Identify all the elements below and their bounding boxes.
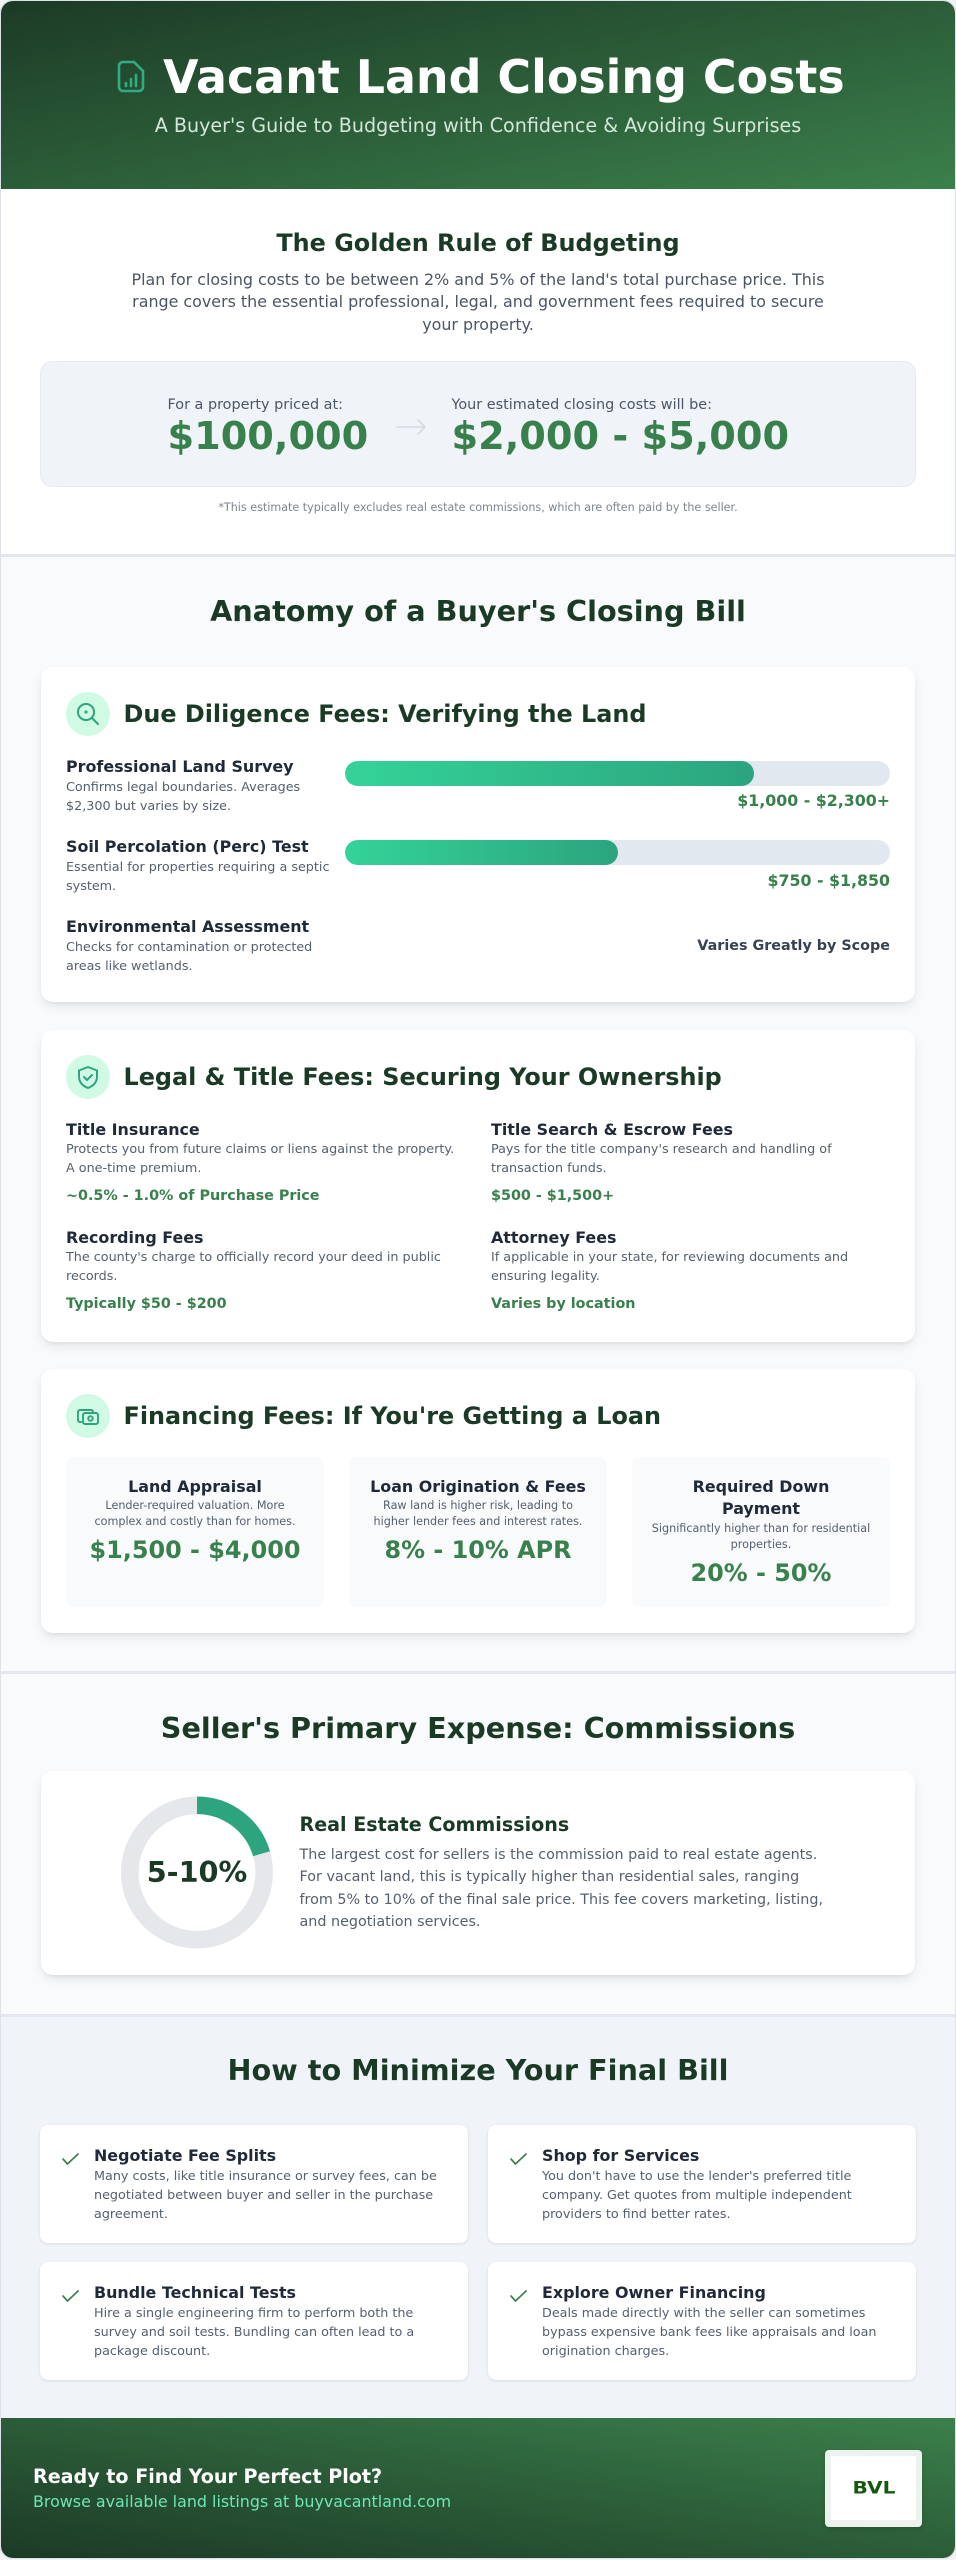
value: ~0.5% - 1.0% of Purchase Price <box>66 1188 320 1204</box>
name: Shop for Services <box>542 2146 699 2164</box>
text block: golden rule explanation: your property. <box>422 315 534 334</box>
description: areas like wetlands. <box>66 959 193 974</box>
description: properties. <box>731 1538 791 1551</box>
name: Bundle Technical Tests <box>94 2283 296 2302</box>
description: records. <box>66 1269 117 1284</box>
name: Title Insurance <box>66 1120 200 1139</box>
footer heading: Ready to Find Your Perfect Plot? <box>33 2465 382 2488</box>
description <box>94 2168 437 2222</box>
item: title insurance <box>66 1120 454 1204</box>
panel: legal and title fees <box>41 1030 915 1342</box>
value: 8% - 10% APR <box>384 1536 572 1564</box>
card: commissions <box>41 1771 915 1975</box>
description <box>66 780 300 814</box>
description: survey and soil tests. Bundling can often lead to a <box>94 2325 414 2340</box>
name: Payment <box>722 1499 800 1518</box>
icon: shield <box>66 1055 110 1099</box>
description: The county's charge to officially record your deed in public <box>66 1250 441 1265</box>
description: Protects you from future claims or liens against the property. <box>66 1142 454 1157</box>
description: bypass expensive bank fees like appraisals and loan <box>542 2325 876 2340</box>
icon: check <box>510 2153 527 2165</box>
description: Confirms legal boundaries. Averages <box>66 780 300 794</box>
value: perc test: $750 - $1,850 <box>768 871 890 890</box>
description: higher lender fees and interest rates. <box>374 1515 582 1528</box>
description: Checks for contamination or protected <box>66 940 312 954</box>
heading: legal and title: Legal & Title Fees: Securing Your Ownership <box>124 1062 722 1090</box>
text block: golden rule explanation: Plan for closing costs to be between 2% and 5% of the land's total purchase price. This <box>132 270 824 289</box>
label: estimated costs: Your estimated closing costs will be: <box>452 397 712 413</box>
card: down payment <box>632 1457 890 1607</box>
value: Typically $50 - $200 <box>66 1296 227 1312</box>
description: A one-time premium. <box>66 1161 201 1176</box>
tip: bundle technical tests <box>40 2262 468 2380</box>
heading: financing: Financing Fees: If You're Getting a Loan <box>124 1402 661 1430</box>
heading: due diligence: Due Diligence Fees: Verifying the Land <box>124 700 646 728</box>
name: Loan Origination & Fees <box>370 1477 586 1496</box>
description <box>66 1142 454 1176</box>
description: Essential for properties requiring a septic <box>66 860 329 874</box>
callout: example calculation <box>40 361 916 487</box>
description: ensuring legality. <box>491 1269 600 1284</box>
tip: explore owner financing <box>488 2262 916 2380</box>
panel: due diligence fees <box>41 667 915 1002</box>
text block: commissions explanation: The largest cost for sellers is the commission paid to real estate agents. <box>300 1847 817 1863</box>
name: Soil Percolation (Perc) Test <box>66 837 309 856</box>
donut label: 5-10% <box>147 1855 247 1889</box>
value: estimated costs: $2,000 - $5,000 <box>452 415 789 459</box>
description <box>66 1250 441 1284</box>
footer banner <box>1 2418 955 2558</box>
logo <box>825 2450 922 2527</box>
text block: commissions explanation <box>299 1847 823 1930</box>
description <box>66 860 329 894</box>
logo wordmark: BVL <box>852 2478 896 2498</box>
text block: commissions explanation: and negotiation services. <box>300 1914 480 1930</box>
heading: golden rule: The Golden Rule of Budgeting <box>276 228 680 256</box>
panel: seller's primary expense <box>1 1674 955 2014</box>
card: loan origination <box>349 1457 607 1607</box>
description: Lender-required valuation. More <box>105 1499 285 1512</box>
description: complex and costly than for homes. <box>94 1515 296 1528</box>
description: system. <box>66 879 116 894</box>
name: Professional Land Survey <box>66 757 294 776</box>
name: Environmental Assessment <box>66 917 309 936</box>
value: $500 - $1,500+ <box>491 1188 614 1204</box>
panel: golden rule of budgeting <box>1 189 955 555</box>
card: land appraisal <box>66 1457 324 1607</box>
bar: perc test <box>345 840 890 865</box>
description <box>491 1142 832 1176</box>
description <box>94 1499 296 1528</box>
name: Required Down <box>693 1477 829 1496</box>
header banner <box>1 1 955 189</box>
tip: shop for services <box>488 2125 916 2243</box>
description: company. Get quotes from multiple independent <box>542 2188 852 2203</box>
description: If applicable in your state, for reviewing documents and <box>491 1250 848 1265</box>
description: Many costs, like title insurance or survey fees, can be <box>94 2168 437 2184</box>
text block: golden rule explanation <box>132 270 824 334</box>
item: perc test <box>66 837 329 894</box>
name: Explore Owner Financing <box>542 2283 766 2302</box>
title: Vacant Land Closing Costs <box>163 50 845 104</box>
description: Pays for the title company's research and handling of <box>491 1142 832 1157</box>
icon: check <box>62 2290 79 2302</box>
icon: check <box>510 2290 527 2302</box>
description: Hire a single engineering firm to perform both the <box>94 2306 413 2321</box>
name: Land Appraisal <box>128 1477 262 1496</box>
description <box>374 1499 582 1528</box>
footnote: *This estimate typically excludes real estate commissions, which are often paid by the seller. <box>218 501 738 514</box>
heading: anatomy: Anatomy of a Buyer's Closing Bill <box>210 594 746 628</box>
description: transaction funds. <box>491 1161 607 1176</box>
description: Deals made directly with the seller can sometimes <box>542 2306 865 2321</box>
icon: magnifying glass <box>66 692 110 736</box>
heading: real estate commissions: Real Estate Commissions <box>300 1813 569 1836</box>
label: property price: For a property priced at: <box>168 397 343 413</box>
name: Recording Fees <box>66 1228 203 1247</box>
name: Title Search & Escrow Fees <box>491 1120 733 1139</box>
icon: document with bar chart <box>118 60 144 92</box>
description: $2,300 but varies by size. <box>66 799 231 814</box>
text block: commissions explanation: from 5% to 10% of the final sale price. This fee covers marketing, listing, <box>300 1892 823 1908</box>
description: Raw land is higher risk, leading to <box>383 1499 573 1512</box>
item: recording fees <box>66 1228 441 1312</box>
name <box>693 1477 829 1518</box>
value: environmental assessment: Varies Greatly by Scope <box>697 938 890 954</box>
text block: commissions explanation: For vacant land, this is typically higher than residential sales, ranging <box>300 1869 799 1885</box>
panel: how to minimize your final bill <box>1 2017 955 2419</box>
description: origination charges. <box>542 2344 669 2359</box>
bar: land survey <box>345 761 890 786</box>
icon: check <box>62 2153 79 2165</box>
description: providers to find better rates. <box>542 2207 731 2222</box>
donut chart: 5-10% <box>121 1796 273 1948</box>
description <box>542 2306 876 2359</box>
item: title search and escrow <box>491 1120 832 1204</box>
heading: seller: Seller's Primary Expense: Commissions <box>161 1711 795 1745</box>
value: land survey: $1,000 - $2,300+ <box>737 791 890 810</box>
icon: money <box>66 1394 110 1438</box>
heading: minimize: How to Minimize Your Final Bill <box>228 2053 728 2087</box>
name: Negotiate Fee Splits <box>94 2146 276 2164</box>
subtitle: A Buyer's Guide to Budgeting with Confidence & Avoiding Surprises <box>155 114 801 137</box>
tip: negotiate fee splits <box>40 2125 468 2243</box>
description: Significantly higher than for residential <box>652 1522 870 1535</box>
description <box>542 2168 852 2222</box>
description <box>94 2306 414 2359</box>
text block: golden rule explanation: range covers the essential professional, legal, and government fees required to secure <box>132 292 824 311</box>
value: property price: $100,000 <box>168 415 368 459</box>
value: $1,500 - $4,000 <box>90 1536 300 1564</box>
panel: financing fees <box>41 1369 915 1633</box>
panel: anatomy of a buyer's closing bill <box>1 557 955 1671</box>
description: agreement. <box>94 2207 168 2222</box>
value: 20% - 50% <box>691 1559 831 1587</box>
name: Attorney Fees <box>491 1228 616 1247</box>
arrow <box>396 419 426 435</box>
description <box>652 1522 870 1551</box>
description: negotiated between buyer and seller in the purchase <box>94 2188 433 2203</box>
description <box>66 940 312 974</box>
item: environmental assessment <box>66 917 312 974</box>
value: Varies by location <box>491 1296 636 1312</box>
item: land survey <box>66 757 300 814</box>
description: package discount. <box>94 2344 210 2359</box>
footer link text: Browse available land listings at buyvacantland.com <box>33 2492 451 2511</box>
item: attorney fees <box>491 1228 848 1312</box>
description <box>491 1250 848 1284</box>
description: You don't have to use the lender's preferred title <box>542 2168 851 2184</box>
